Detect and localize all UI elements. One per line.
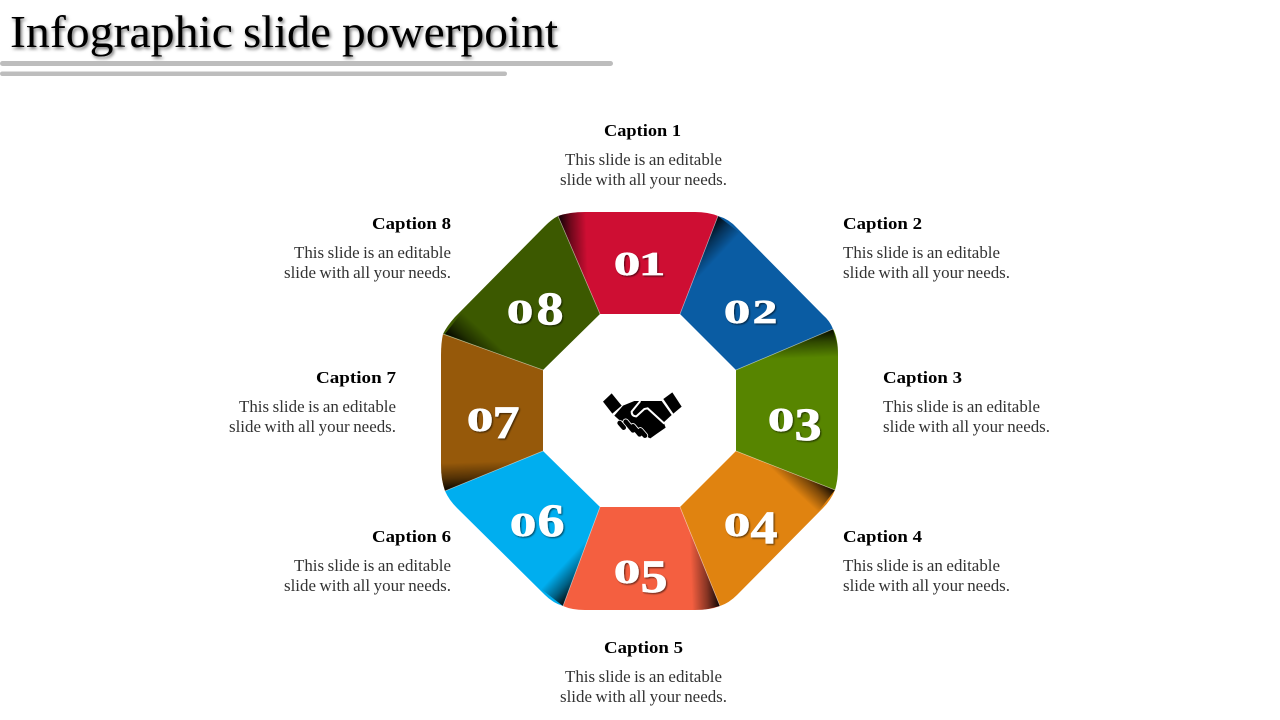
caption 3: Caption 3: [883, 368, 962, 387]
number 03: [768, 398, 822, 450]
segment 06: [445, 451, 600, 606]
number 02: [724, 292, 777, 331]
number 04: 0: [724, 505, 750, 544]
number 08: 8: [536, 282, 564, 334]
caption 6: [284, 527, 451, 595]
number 05: 0: [614, 552, 640, 591]
number 02: 2: [753, 293, 777, 331]
caption 4: [843, 527, 1010, 595]
caption 3: This slide is an editable: [883, 397, 1040, 416]
number 03: 0: [768, 400, 794, 439]
caption 5: slide with all your needs.: [560, 687, 727, 706]
number 06: 0: [510, 505, 536, 544]
title: slide: [243, 6, 331, 57]
caption 5: This slide is an editable: [565, 667, 722, 686]
caption 2: slide with all your needs.: [843, 263, 1010, 282]
caption 4: Caption 4: [843, 527, 923, 546]
segment 02: [680, 216, 833, 370]
caption 8: slide with all your needs.: [284, 263, 451, 282]
caption 1: This slide is an editable: [565, 150, 722, 169]
number 02: 0: [724, 292, 750, 331]
number 07: 0: [467, 400, 493, 439]
caption 8: [284, 214, 451, 282]
title: [10, 6, 558, 57]
number 01: [614, 244, 665, 283]
caption 6: This slide is an editable: [294, 556, 451, 575]
title underline rules: [0, 61, 613, 76]
caption 1: Caption 1: [604, 121, 681, 140]
number 06: 6: [537, 494, 565, 546]
segment 03: [736, 329, 842, 490]
number 04: 4: [750, 501, 778, 553]
caption 2: This slide is an editable: [843, 243, 1000, 262]
caption 8: Caption 8: [372, 214, 451, 233]
number 04: [724, 501, 778, 553]
caption 5: Caption 5: [604, 638, 683, 657]
octagon diagram: [436, 204, 842, 614]
caption 3: [883, 368, 1050, 436]
icon: handshake: [603, 392, 682, 438]
caption 3: slide with all your needs.: [883, 417, 1050, 436]
segment 01: [558, 204, 718, 314]
caption 2: [843, 214, 1010, 282]
segment 05: [563, 507, 720, 614]
caption 7: This slide is an editable: [239, 397, 396, 416]
number 06: [510, 494, 565, 546]
caption 5: [560, 638, 727, 706]
segment 07: [436, 334, 543, 491]
segment 04: [680, 451, 835, 606]
caption 2: Caption 2: [843, 214, 922, 233]
caption 6: slide with all your needs.: [284, 576, 451, 595]
number 03: 3: [794, 398, 822, 450]
title: Infographic: [10, 6, 233, 57]
segment 08: [443, 216, 600, 370]
number 01: 0: [614, 244, 640, 283]
caption 4: This slide is an editable: [843, 556, 1000, 575]
number 08: 0: [507, 292, 533, 331]
caption 7: [229, 368, 397, 436]
number 07: 7: [492, 396, 520, 448]
title: powerpoint: [342, 6, 558, 57]
caption 6: Caption 6: [372, 527, 451, 546]
caption 1: [560, 121, 727, 189]
number 01: 1: [639, 244, 665, 283]
caption 8: This slide is an editable: [294, 243, 451, 262]
caption 7: Caption 7: [316, 368, 397, 387]
caption 7: slide with all your needs.: [229, 417, 396, 436]
number 07: [467, 396, 520, 448]
number 05: [614, 550, 668, 602]
number 08: [507, 282, 564, 334]
caption 1: slide with all your needs.: [560, 170, 727, 189]
caption 4: slide with all your needs.: [843, 576, 1010, 595]
number 05: 5: [640, 550, 668, 602]
